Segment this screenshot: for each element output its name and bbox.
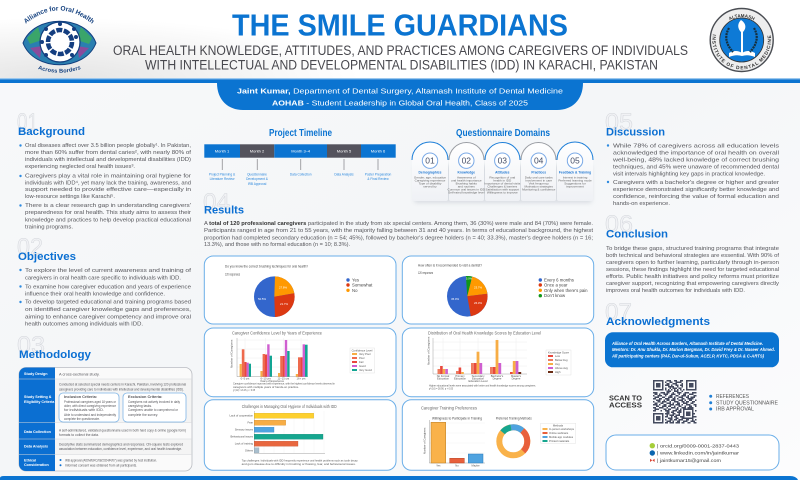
panel: objectives: To explore the level of current awareness and training of [25, 268, 191, 274]
panel: questionnaire domains: 02 [462, 156, 471, 166]
exclusion criteria box [123, 393, 186, 422]
panel: pie chart brushing techniques: 21.7% [280, 302, 288, 306]
panel: pie chart brushing techniques: No [352, 288, 358, 293]
panel: project timeline: Development & [246, 177, 269, 181]
panel: questionnaire domains: health in IDD [493, 178, 512, 182]
panel: questionnaire domains: Visit frequency [529, 181, 549, 185]
panel: questionnaire domains: Willingness to improve [487, 190, 518, 194]
panel: results text: 13.3%), and those with no formal education (n = 10; 8.3%). [204, 242, 350, 248]
panel: knowledge by education bar chart [402, 328, 594, 397]
panel: challenges bar chart: Lack of training [235, 442, 253, 446]
panel: project timeline: Data Analysis [334, 172, 354, 176]
panel: knowledge by education bar chart: No Formal [437, 374, 450, 378]
panel: questionnaire domains: 03 [498, 156, 507, 166]
panel: project timeline: Month 3–4 [291, 148, 311, 153]
panel: methodology table: Study Design [24, 372, 48, 376]
panel: challenges bar chart: Others [245, 448, 254, 452]
panel: background: Background [18, 126, 85, 138]
panel: results text: Results [204, 204, 244, 216]
panel: acknowledgments: Mentors: Dr. Anu Shukla, Dr. Marion Bergman, Dr. David Frey & Dr. Naseer Ahmed. [612, 347, 775, 352]
panel: questionnaire domains: Preferred learning mode [558, 178, 592, 182]
panel: discussion: confidence, reinforcing the value of formal education and [613, 194, 779, 200]
exclusion criteria box: Caregivers unable to comprehend or [128, 407, 179, 412]
panel: challenges bar chart: Lack of cooperation [230, 414, 253, 418]
panel: challenges bar chart: Fear [247, 420, 253, 424]
panel: questionnaire domains: Caregiving experience [415, 178, 446, 182]
exclusion criteria box: complete the survey. [128, 412, 158, 417]
panel: conclusion: improves oral health outcomes for individuals with IDD. [606, 288, 745, 294]
panel: methodology table: Study Setting & [24, 395, 52, 399]
inclusion criteria box [59, 393, 119, 422]
panel: results text: 04 [203, 189, 230, 216]
panel: questionnaire domains: and routines [458, 184, 475, 188]
panel: questionnaire domains: Questionnaire Domains [456, 127, 550, 139]
panel: methodology table: Ethical [24, 458, 36, 462]
panel: challenges bar chart [204, 400, 396, 470]
panel: background: individuals with intellectual and developmental disabilities (IDD) [25, 157, 191, 163]
panel: questionnaire domains: Challenges & barriers [487, 184, 518, 188]
panel: questionnaire domains: Practices [531, 170, 546, 174]
subtitle [113, 43, 688, 74]
panel: caregiver confidence bar chart: Very Poor [359, 352, 371, 356]
panel: questionnaire domains: improvement [566, 184, 584, 188]
panel: questionnaire domains: Self-rated knowledge level [448, 190, 485, 194]
panel: acknowledgments: 07 [605, 299, 632, 326]
panel: training preferences charts: Willingness to Participate in Training [432, 417, 482, 421]
panel: project timeline: Project Planning & [209, 172, 236, 176]
panel: knowledge by education bar chart: Primary [455, 374, 465, 378]
panel: acknowledgments: Acknowledgments [606, 316, 710, 328]
panel: knowledge by education bar chart: Degree [493, 376, 502, 380]
panel: questionnaire domains: Gender, age, education [414, 175, 446, 179]
panel: discussion: visit intervals highlighting key gaps in practical knowledge. [613, 172, 765, 178]
inclusion criteria box: Professional caregivers aged 18 years or [64, 399, 117, 404]
panel: background: individuals with IDD⁴, yet many lack the training, awareness, and [25, 180, 191, 186]
icon: QR code [653, 381, 696, 423]
panel: discussion: 05 [605, 109, 633, 136]
panel: discussion: While 78% of caregivers across all education levels [613, 144, 779, 150]
panel: knowledge by education bar chart: Bachelor's [491, 374, 504, 378]
panel: project timeline: Month 5 [337, 148, 352, 153]
panel: knowledge by education bar chart: Number of Caregivers [426, 336, 430, 365]
panel: questionnaire domains: Feedback & Training [559, 170, 591, 174]
panel: questionnaire domains: Brushing habits [456, 181, 477, 185]
panel: pie chart dentist visits: 23.7% [474, 286, 482, 290]
panel: training preferences charts: In-person workshops [549, 427, 575, 431]
panel: objectives: aiming to enhance caregiver competency and improve oral [25, 314, 191, 320]
panel: training preferences charts: Number of Caregivers [422, 427, 426, 454]
panel: caregiver confidence bar chart: 0–5 yrs [241, 376, 250, 380]
list: access links: REFERENCES [716, 394, 749, 400]
panel: contact details: | orcid.org/0009-0001-2837-0443 [657, 443, 739, 449]
panel: project timeline: Questionnaire [247, 172, 267, 176]
panel: conclusion: both technical and behavioral strategies are essential. With 90% of [606, 253, 779, 259]
logo: Alliance for Oral Health: Across Borders [38, 66, 80, 73]
author banner: Jaint Kumar, Department of Dental Surgery, Altamash Institute of Dental Medicine [237, 88, 563, 96]
panel: objectives: on identified caregiver knowledge gaps and preferences, [25, 307, 191, 313]
panel: methodology table: Data Analysis [24, 444, 48, 448]
panel: acknowledgments: Alliance of Oral Health Across Borders, Altamash Institute of Dental Medicine. [611, 341, 763, 346]
panel: methodology table: Eligibility Criteria [24, 400, 55, 404]
panel: project timeline: Month 2 [250, 148, 265, 153]
panel: questionnaire domains: Interest in training [563, 175, 588, 179]
panel: training preferences charts: Maybe [472, 463, 480, 467]
panel: caregiver confidence bar chart: Number of Caregivers [230, 339, 234, 368]
panel: questionnaire domains: Demographics [419, 170, 442, 174]
panel: training preferences charts [402, 400, 594, 470]
panel: pie chart dentist visits: Every 6 months [544, 278, 574, 282]
panel: challenges bar chart: Behavioural issues [230, 434, 254, 438]
panel: discussion [605, 109, 779, 207]
panel: project timeline: Data Collection [290, 172, 312, 176]
panel: pie chart dentist visits: How often is it recommended to visit a dentist? [418, 264, 482, 268]
panel: questionnaire domains: Type of disability [419, 181, 442, 185]
panel: results text: Participants ranged in age from 21 to 55 years, with the majority falling between 31 and 40 years. In terms of educational background, the highest [204, 228, 593, 234]
author banner: AOHAB - Student Leadership in Global Oral Health, Class of 2025 [272, 100, 528, 108]
panel: caregiver confidence bar chart: caregivers with multiple years of hands-on practice. [233, 385, 299, 389]
panel: training preferences charts: Online webinars [549, 431, 569, 435]
subtitle: WITH INTELLECTUAL AND DEVELOPMENTAL DISABILITIES (IDD) IN KARACHI, PAKISTAN [145, 58, 658, 74]
panel: pie chart dentist visits: 26.3% [474, 301, 482, 305]
panel: objectives: caregivers in oral health care specific to individuals with IDD. [25, 276, 181, 282]
panel: pie chart dentist visits: Only when there's pain [544, 288, 588, 293]
header band [0, 0, 800, 83]
panel: project timeline [204, 127, 396, 186]
panel: challenges bar chart: and gum disease due to difficulty in brushing or flossing, fear, and behavioural issues. [242, 462, 356, 466]
panel: conclusion: efforts. Public health initiatives and policy reforms must prioritize [606, 274, 779, 280]
panel: project timeline: Project Timeline [269, 127, 332, 139]
panel: pie chart dentist visits: Don't know [544, 293, 566, 298]
panel: methodology table: A cross-sectional study. [59, 372, 100, 376]
panel: questionnaire domains: Daily oral care tasks [525, 175, 553, 179]
inclusion criteria box: Inclusion Criteria: [64, 394, 97, 399]
panel: objectives: influence their oral health knowledge and confidence. [25, 292, 165, 298]
panel: conclusion: Conclusion [606, 229, 668, 241]
scan to access label [609, 395, 643, 409]
panel: discussion: Discussion [606, 127, 665, 139]
panel: knowledge by education bar chart: Degree [512, 376, 521, 380]
panel: questionnaire domains: Suggestions for [564, 181, 586, 185]
panel: contact details: | jaintkumar15@gmail.com [657, 458, 721, 464]
panel: background: Caregivers play a vital role in maintaining oral hygiene for [25, 174, 191, 180]
panel: pie chart dentist visits: 120 responses [418, 271, 433, 275]
inclusion criteria box: older, with direct caregiving experience [64, 403, 116, 408]
panel: training preferences charts: Methods [553, 424, 564, 428]
panel: caregiver confidence bar chart: Poor [359, 356, 365, 360]
logo: Altamash Institute of Dental Medicine [710, 8, 774, 72]
panel: training preferences charts: Caregiver Training Preferences [421, 406, 478, 410]
panel: pie chart brushing techniques: 120 responses [225, 272, 240, 276]
panel: discussion: experience demonstrated significantly better knowledge and [613, 187, 779, 193]
panel: objectives: health outcomes among individuals with IDD. [25, 322, 143, 328]
panel: methodology table: Informed consent was obtained from all participants. [65, 463, 137, 468]
panel: acknowledgments [605, 299, 779, 367]
panel: questionnaire domains: Knowledge [458, 170, 475, 174]
panel: questionnaire domains: 05 [570, 156, 580, 166]
list: access links [709, 394, 779, 413]
scan to access label: ACCESS [609, 402, 642, 409]
panel: methodology table: A self-administered, validated questionnaire used in both hard copy & online (google form) [59, 427, 187, 432]
panel: challenges bar chart: Top challenges: Individuals with IDD frequently experience oral health problems such as tooth decay [242, 458, 358, 462]
panel: background: There is a clear research gap in understanding caregivers' [25, 203, 191, 209]
exclusion criteria box: caregiving tasks. [128, 403, 152, 408]
panel: questionnaire domains: served by [423, 184, 437, 188]
panel: conclusion: sessions, these findings highlight the need for targeted educational [606, 267, 779, 273]
panel: training preferences charts: Yes [436, 463, 441, 467]
panel: conclusion: caregivers open to further learning, particularly through in-person [606, 260, 779, 266]
panel: project timeline: IRB Approval [248, 182, 267, 186]
panel: questionnaire domains: 01 [425, 156, 435, 166]
subtitle: ORAL HEALTH KNOWLEDGE, ATTITUDES, AND PRACTICES AMONG CAREGIVERS OF INDIVIDUALS [113, 43, 688, 59]
panel: training preferences charts: No [455, 463, 459, 467]
panel: project timeline: Month 1 [215, 148, 230, 153]
panel: knowledge by education bar chart: Low [555, 354, 560, 358]
panel: methodology table: Data Collection [24, 430, 52, 434]
panel: methodology table: Descriptive stats summarized demographics and responses. Chi-square tests explored [59, 441, 183, 446]
panel: objectives: 02 [17, 234, 43, 261]
panel: methodology table: IRB approval (AIDM/ERC/08/2024/R/07) was granted by host institution. [65, 457, 157, 462]
panel: discussion: acknowledged the importance of oral health on overall [613, 150, 779, 156]
list: access links: STUDY QUESTIONNAIRE [716, 400, 779, 406]
panel: background: more than 60% suffer from dental caries², with nearly 80% of [25, 150, 191, 156]
logo: Alliance for Oral Health [22, 6, 96, 73]
panel: acknowledgments: All participating centers (PAF, Dar-ul-Sukun, ACELP, KVTC, PDSA & C-ARTS) [611, 353, 764, 358]
panel: background: preparedness for oral health. This study aims to assess their [25, 210, 191, 216]
panel: caregiver confidence bar chart: Very Good [359, 368, 372, 372]
panel: pie chart brushing techniques [204, 256, 396, 324]
panel: training preferences charts: Mobile app modules [549, 435, 574, 439]
panel: results text: proportion had completed secondary education (n = 54; 45%), followed by bachelor's degree holders (n = 40; 33.3%), master's degree holders (n = 16; [204, 235, 593, 241]
panel: questionnaire domains [412, 127, 593, 203]
panel: knowledge by education bar chart: Education [437, 376, 449, 380]
panel: caregiver confidence bar chart: Fair [359, 360, 364, 364]
panel: questionnaire domains: Satisfaction with support [486, 187, 519, 191]
panel: contact details: | www.linkedin.com/in/jaintkumar [657, 451, 739, 457]
panel: conclusion: 06 [605, 211, 633, 238]
panel: background: training programs. [25, 224, 73, 230]
inclusion criteria box: Able to understand and independently [64, 412, 116, 417]
exclusion criteria box: Caregivers not actively involved in daily [128, 399, 180, 404]
panel: knowledge by education bar chart: High [555, 370, 561, 374]
panel: background [17, 109, 191, 230]
panel: challenges bar chart: Challenges in Managing Oral Hygiene of Individuals with IDD [242, 404, 337, 409]
panel: questionnaire domains: Motivation strategies [525, 184, 553, 188]
panel: pie chart brushing techniques: Do you know the correct brushing techniques for oral health? [225, 264, 308, 268]
panel: caregiver confidence bar chart: χ² (12) = 21.45, p < 0.05 [233, 388, 255, 392]
panel: discussion: well-being, 48% lacked knowledge of correct brushing [612, 158, 779, 164]
panel: background: low-resource settings like Karachi⁵. [25, 193, 115, 200]
panel: pie chart brushing techniques: Somewhat [352, 283, 373, 288]
panel: discussion: techniques, and 45% were unaware of recommended dental [613, 164, 779, 170]
panel: questionnaire domains: Common oral issues in IDD [447, 187, 486, 191]
panel: methodology table [19, 368, 192, 471]
panel: questionnaire domains: Awareness of [457, 175, 476, 179]
title: THE SMILE GUARDIANS [232, 8, 568, 42]
panel: knowledge by education bar chart: Below Avg [555, 358, 568, 362]
logo: Altamash Institute of Dental Medicine: INSTITUTE OF DENTAL MEDICINE [712, 34, 772, 70]
panel: discussion: hands-on experience. [613, 201, 670, 207]
panel: caregiver confidence bar chart [204, 328, 396, 397]
panel: objectives [17, 234, 191, 328]
panel: pie chart dentist visits: 5.0% [466, 276, 473, 280]
panel: knowledge by education bar chart: Knowledge Score [548, 350, 570, 354]
panel: project timeline: Month 6 [371, 148, 386, 153]
panel: knowledge by education bar chart: Education [472, 376, 484, 380]
panel: objectives: To develop targeted educational and training programs based [25, 300, 191, 306]
panel: questionnaire domains: Attitudes [495, 170, 510, 174]
panel: background: Oral diseases affect over 3.5 billion people globally¹. In Pakistan, [25, 143, 191, 149]
panel: questionnaire domains: Monitoring & confidence [522, 187, 556, 191]
logo: Altamash Institute of Dental Medicine: ALTAMASH [729, 14, 755, 20]
panel: pie chart brushing techniques: 50.5% [258, 297, 266, 301]
panel: training preferences charts: Printed materials [549, 439, 570, 443]
panel: knowledge by education bar chart: Education Level [468, 379, 488, 383]
heading: methodology: Methodology [19, 349, 92, 361]
panel: background: knowledge and practices to help develop practical educational [25, 217, 191, 223]
panel: training preferences charts: Preferred Training Methods [496, 417, 532, 421]
panel: knowledge by education bar chart: Secondary [472, 374, 485, 378]
panel: results text [203, 189, 593, 248]
panel: caregiver confidence bar chart: 11–15 yrs [277, 376, 290, 380]
panel: knowledge by education bar chart: Master's [511, 374, 522, 378]
panel: project timeline: Poster Preparation [365, 172, 392, 176]
panel: objectives: To examine how caregiver education and years of experience [25, 284, 191, 290]
panel: results text: A total of 120 professional caregivers participated in the study from six special centers. Among them, 36 (30%) were male and 84 (70%) were female. [204, 221, 593, 227]
panel: caregiver confidence bar chart: Caregiver Confidence Level by Years of Experience [232, 331, 322, 336]
panel: challenges bar chart: Sensory issues [235, 428, 254, 432]
panel: questionnaire domains: Importance of dental visits [484, 181, 521, 185]
panel: methodology table: association between education, confidence level, experience, and oral health knowledge. [59, 446, 182, 451]
panel: background: 01 [17, 109, 38, 136]
footer bar [0, 476, 798, 480]
panel: caregiver confidence bar chart: Years of Experience [260, 379, 284, 383]
panel: caregiver confidence bar chart: 6–10 yrs [261, 376, 272, 380]
panel: knowledge by education bar chart: Avg [555, 362, 560, 366]
panel: methodology table: Consideration [24, 463, 50, 467]
panel: questionnaire domains: oral health importance [451, 178, 482, 182]
inclusion criteria box: complete the questionnaire. [64, 416, 100, 421]
panel: methodology table: caregivers providing care to individuals with intellectual and developmental disabilities (IDD). [59, 386, 184, 391]
panel: knowledge by education bar chart: Education [454, 376, 466, 380]
panel: caregiver confidence bar chart: 16+ yrs [297, 376, 306, 380]
panel: pie chart brushing techniques: Yes [352, 278, 359, 282]
panel: pie chart dentist visits [402, 256, 594, 324]
panel: methodology table: formats to collect the data. [59, 432, 99, 437]
panel: conclusion: To bridge these gaps, structured training programs that integrate [606, 246, 779, 252]
panel: conclusion: caregiver support, recognizing that empowering caregivers directly [606, 281, 779, 287]
panel: project timeline: & Final Review [367, 177, 389, 181]
author banner [217, 83, 583, 110]
panel: project timeline: Literature Review [210, 177, 235, 181]
panel: pie chart dentist visits: 45.0% [451, 297, 459, 301]
panel: knowledge by education bar chart: χ² (16) = 28.90, p < 0.05 [429, 386, 453, 390]
panel: background: support needed to provide effective care—especially in [25, 187, 191, 193]
panel: questionnaire domains: Involvement in care [525, 178, 552, 182]
logo: Alliance for Oral Health: Alliance for Oral Health [24, 6, 94, 24]
panel: contact details [606, 435, 779, 470]
heading: methodology: 03 [17, 332, 45, 359]
panel: discussion: Caregivers with a bachelor's degree or higher and greater [613, 180, 779, 186]
inclusion criteria box: for individuals with IDD. [64, 407, 104, 412]
panel: questionnaire domains: 04 [534, 156, 544, 166]
scan to access label: SCAN TO [609, 395, 643, 402]
exclusion criteria box: Exclusion Criteria: [128, 394, 162, 399]
panel: conclusion [605, 211, 779, 294]
list: access links: IRB APPROVAL [716, 407, 754, 413]
panel: knowledge by education bar chart: Higher educational levels were associated with better oral health knowledge scores among caregivers. [429, 383, 536, 387]
panel: methodology table: Conducted at selected special needs centers in Karachi, Pakistan, involving 120 professional [59, 382, 186, 387]
panel: pie chart brushing techniques: 27.8% [279, 286, 287, 290]
panel: knowledge by education bar chart: Distribution of Oral Health Knowledge Scores by Education Level [428, 331, 541, 336]
panel: questionnaire domains: Recognition of oral [489, 175, 516, 179]
panel: pie chart dentist visits: Once a year [544, 283, 568, 288]
panel: caregiver confidence bar chart: Caregiver confidence improved with experience, with the highest confidence levels observed in [233, 382, 335, 386]
panel: knowledge by education bar chart: Above Avg [555, 366, 568, 370]
panel: caregiver confidence bar chart: Good [359, 364, 366, 368]
heading: methodology [17, 332, 92, 361]
panel: objectives: Objectives [18, 251, 76, 263]
panel: background: experiencing neglected oral health issues³. [25, 164, 135, 170]
panel: caregiver confidence bar chart: Confidence Level [352, 348, 373, 352]
